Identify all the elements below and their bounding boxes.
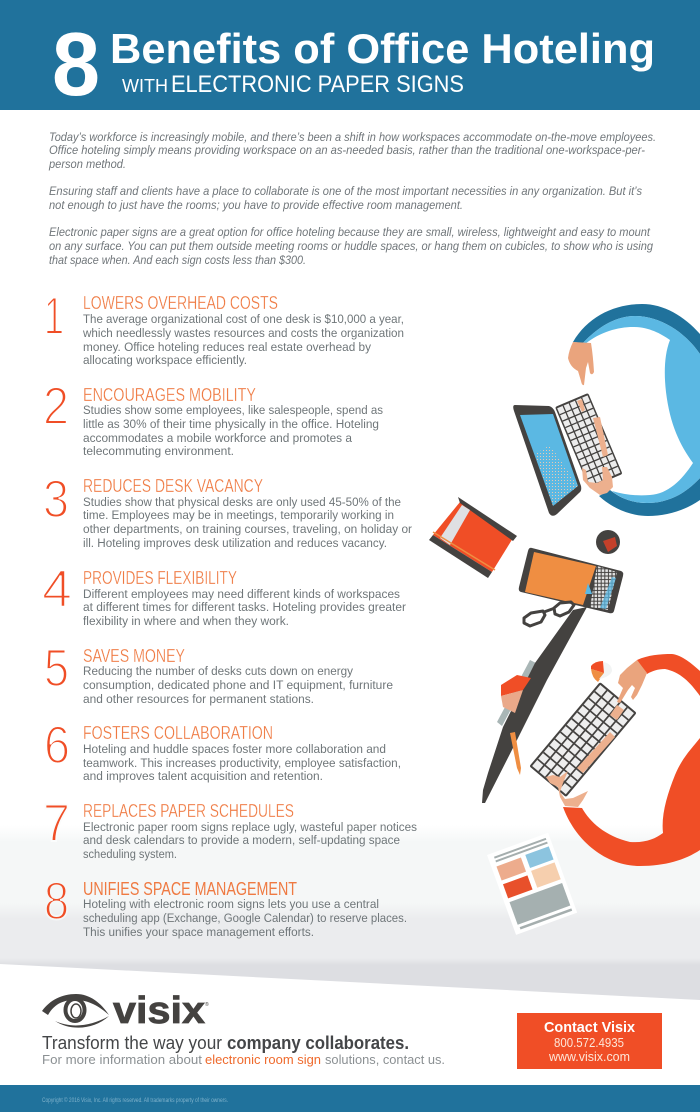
benefit 5: SAVES MONEY: [83, 646, 185, 666]
benefit 4: [42, 560, 406, 628]
contact sentence: For more information about: [42, 1053, 203, 1067]
benefit 5: [44, 639, 393, 706]
contact button: [517, 1013, 662, 1069]
benefit 3: ill. Hoteling improves desk utilization and reduces vacancy.: [83, 536, 387, 550]
icon: eye: [42, 994, 109, 1028]
benefit 4: flexibility in where and when they work.: [83, 614, 289, 628]
intro text: not enough to just have the rooms; you have to provide effective room management.: [49, 198, 463, 212]
footer band: [0, 1085, 700, 1112]
benefit 8: UNIFIES SPACE MANAGEMENT: [83, 879, 297, 899]
benefit 8: 8: [44, 872, 69, 931]
tagline: Transform the way your: [42, 1033, 222, 1053]
benefit 7: scheduling system.: [83, 847, 177, 861]
intro text: that space when. And each sign costs less than $300.: [49, 253, 306, 267]
benefit 7: Electronic paper room signs replace ugly, wasteful paper notices: [83, 820, 417, 834]
benefit 4: PROVIDES FLEXIBILITY: [83, 568, 237, 588]
benefit 5: 5: [44, 639, 69, 698]
benefit 2: 2: [43, 377, 69, 436]
title: Benefits of Office Hoteling: [110, 25, 655, 72]
benefit 4: 4: [42, 560, 72, 619]
benefit 8: scheduling app (Exchange, Google Calendar) to reserve places.: [83, 911, 407, 925]
intro text: on any surface. You can put them outside meeting rooms or huddle spaces, or hang them on cubicles, to show who is using: [49, 239, 653, 253]
benefit 2: ENCOURAGES MOBILITY: [83, 385, 256, 405]
illustration: red notebook: [429, 497, 517, 578]
benefit 3: REDUCES DESK VACANCY: [83, 476, 263, 496]
benefit 2: telecommuting environment.: [83, 444, 234, 458]
benefit 7: 7: [43, 794, 70, 853]
contact button: www.visix.com: [548, 1050, 630, 1064]
title numeral: 8: [52, 15, 100, 115]
illustration: blue sleeved person with laptop: [513, 304, 700, 516]
benefit 4: at different times for different tasks. Hoteling provides greater: [83, 600, 406, 614]
benefit 8: This unifies your space management efforts.: [83, 925, 314, 939]
benefit 2: Studies show some employees, like salespeople, spend as: [83, 403, 383, 417]
intro text: [48, 130, 656, 267]
benefit 7: [43, 794, 417, 861]
benefit 2: accommodates a mobile workforce and promotes a: [83, 431, 352, 445]
tagline: company collaborates.: [227, 1033, 409, 1053]
benefit 3: 3: [43, 470, 69, 529]
benefit 2: [43, 377, 383, 458]
benefit 2: little as 30% of their time physically in the office. Hoteling: [83, 417, 379, 431]
benefit 1: The average organizational cost of one desk is $10,000 a year,: [83, 312, 404, 326]
benefit 1: money. Office hoteling reduces real estate overhead by: [83, 340, 372, 354]
benefit 8: Hoteling with electronic room signs lets you use a central: [83, 897, 379, 911]
benefit 6: teamwork. This increases productivity, employee satisfaction,: [83, 756, 401, 770]
benefit 1: allocating workspace efficiently.: [83, 353, 247, 367]
benefit 8: [44, 872, 407, 939]
benefit 4: Different employees may need different kinds of workspaces: [83, 587, 400, 601]
benefit 3: time. Employees may be in meetings, temporarily working in: [83, 508, 394, 522]
benefit 3: Studies show that physical desks are only used 45-50% of the: [83, 495, 401, 509]
intro text: Today’s workforce is increasingly mobile, and there’s been a shift in how workspaces accommodate on-the-move employees.: [49, 130, 656, 144]
contact sentence: solutions, contact us.: [325, 1053, 445, 1067]
benefit 1: 1: [44, 287, 64, 346]
benefit 5: and other resources for permanent stations.: [83, 692, 314, 706]
subtitle: WITH: [122, 76, 168, 96]
benefit 6: FOSTERS COLLABORATION: [83, 723, 273, 743]
benefit 6: 6: [44, 716, 70, 775]
illustration: glasses: [524, 602, 574, 626]
benefit 5: Reducing the number of desks cuts down on energy: [83, 664, 354, 678]
intro text: Office hoteling simply means providing workspace on an as-needed basis, rather than the traditional one-workspace-per-: [49, 143, 645, 157]
intro text: person method.: [48, 157, 126, 171]
illustration: pen cup: [596, 530, 620, 554]
contact button: 800.572.4935: [554, 1036, 624, 1050]
benefit 1: which needlessly wastes resources and costs the organization: [82, 326, 404, 340]
wordmark: visix: [113, 990, 205, 1032]
benefit 1: [44, 287, 404, 367]
visix logo: [42, 990, 209, 1032]
illustration: tablet: [519, 548, 623, 613]
visix logo: ®: [205, 1001, 209, 1008]
illustration: dark desk edge: [482, 607, 587, 803]
benefit 5: consumption, dedicated phone and IT equipment, furniture: [83, 678, 393, 692]
benefit 7: and desk calendars to provide a modern, self-updating space: [83, 833, 400, 847]
benefit 3: other departments, on training courses, traveling, on holiday or: [83, 522, 412, 536]
illustration: orange sleeved person with keyboard: [529, 654, 700, 866]
intro text: Electronic paper signs are a great option for office hoteling because they are small, wireless, lightweight and easy to mount: [49, 225, 651, 239]
header band: [0, 0, 700, 115]
illustration: paper document: [487, 833, 577, 935]
contact button: Contact Visix: [544, 1019, 636, 1036]
benefit 6: and improves talent acquisition and retention.: [83, 769, 323, 783]
subtitle: ELECTRONIC PAPER SIGNS: [171, 71, 464, 98]
benefit 1: LOWERS OVERHEAD COSTS: [83, 293, 278, 313]
benefit 6: Hoteling and huddle spaces foster more collaboration and: [83, 742, 386, 756]
benefit 7: REPLACES PAPER SCHEDULES: [83, 801, 294, 821]
benefit 3: [43, 470, 412, 550]
benefit 6: [44, 716, 401, 783]
intro text: Ensuring staff and clients have a place to collaborate is one of the most important necessities in any organization. But it’s: [49, 184, 642, 198]
copyright: Copyright © 2016 Visix, Inc. All rights reserved. All trademarks property of their owners.: [42, 1097, 228, 1104]
contact sentence: electronic room sign: [205, 1053, 321, 1067]
